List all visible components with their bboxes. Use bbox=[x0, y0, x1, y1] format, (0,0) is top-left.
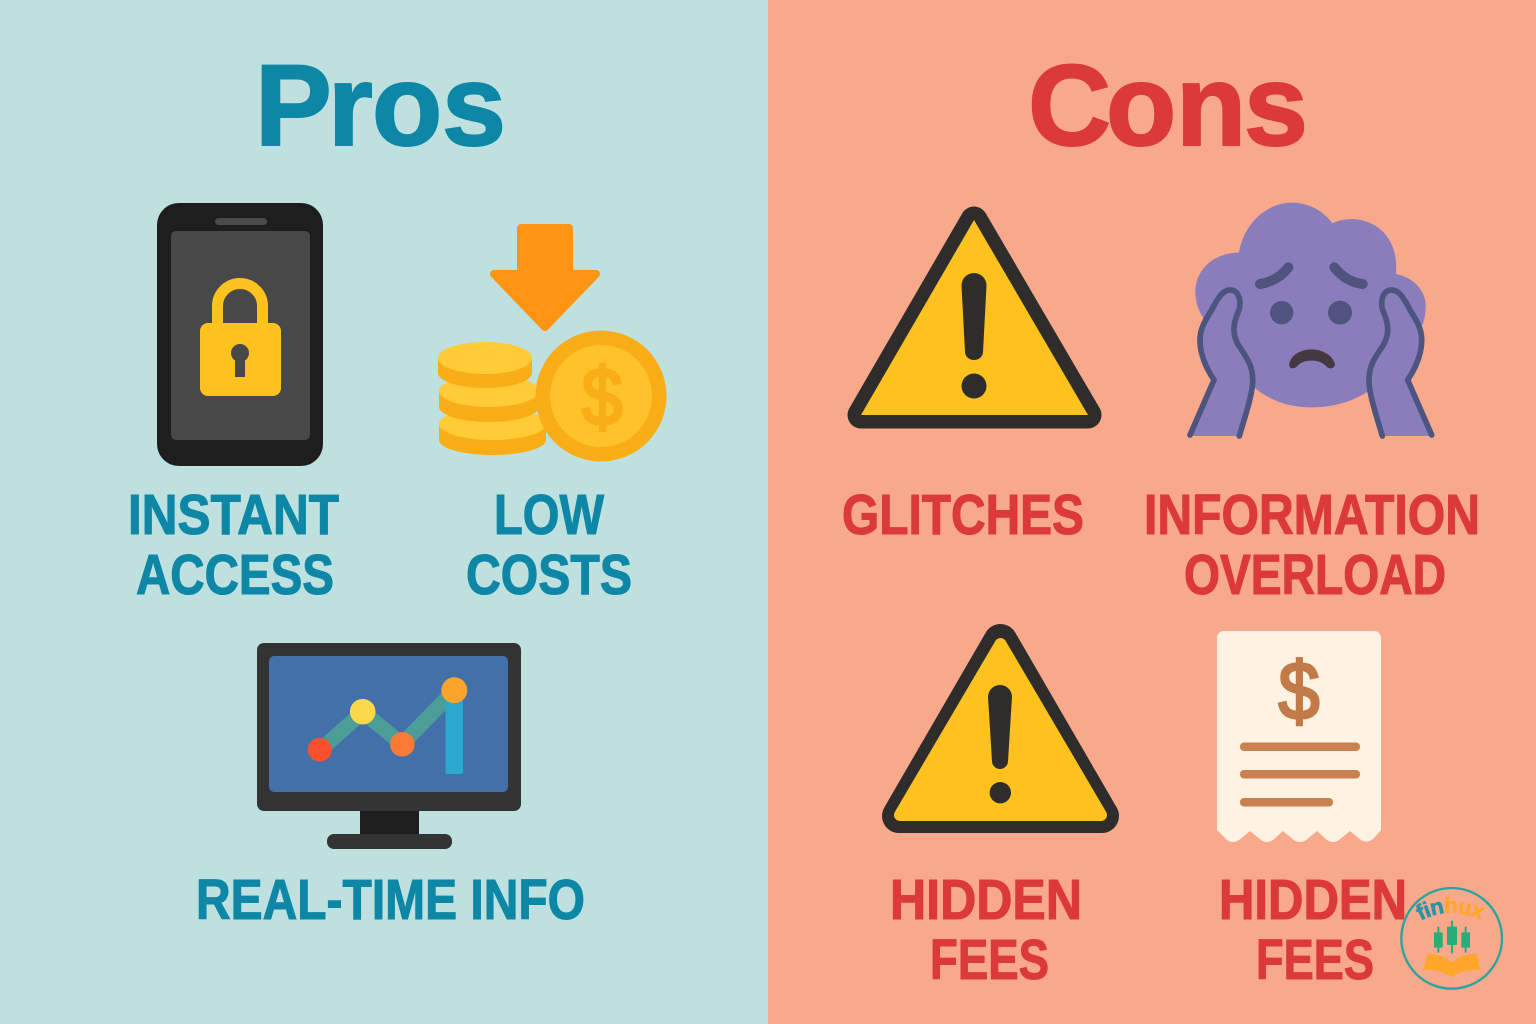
heading: Cons: Cons bbox=[1028, 42, 1308, 170]
icon: receipt with dollar bbox=[1217, 631, 1381, 842]
label: hidden fees right: FEES bbox=[1256, 928, 1374, 992]
icon: warning triangle hidden fees bbox=[899, 641, 1102, 816]
icon: monitor with line chart bbox=[257, 643, 521, 849]
label: low costs: LOW bbox=[494, 483, 604, 547]
label: hidden fees right: HIDDEN bbox=[1219, 868, 1407, 932]
icon: coins with down arrow bbox=[438, 228, 666, 462]
label: glitches: GLITCHES bbox=[842, 483, 1084, 547]
label: low costs bbox=[466, 483, 632, 607]
label: hidden fees left bbox=[890, 868, 1082, 992]
panel: pros background bbox=[0, 0, 768, 1024]
logo: finhux badge bbox=[1400, 886, 1504, 990]
label: hidden fees left: HIDDEN bbox=[890, 868, 1082, 932]
label: hidden fees left: FEES bbox=[930, 928, 1049, 992]
label: information overload: INFORMATION bbox=[1144, 483, 1480, 547]
icon: coins with down arrow: $ bbox=[582, 352, 622, 443]
label: information overload: OVERLOAD bbox=[1184, 543, 1446, 607]
label: instant access bbox=[128, 483, 339, 607]
label: real-time info: REAL-TIME INFO bbox=[196, 868, 585, 932]
label: instant access: ACCESS bbox=[136, 543, 334, 607]
icon: overwhelmed purple face bbox=[1190, 203, 1432, 436]
icon: warning triangle glitches bbox=[861, 220, 1088, 415]
panel: cons background bbox=[768, 0, 1536, 1024]
logo: finhux badge: finhux bbox=[1416, 896, 1486, 920]
label: information overload bbox=[1144, 483, 1480, 607]
heading: Pros: Pros bbox=[255, 42, 506, 170]
label: instant access: INSTANT bbox=[128, 483, 339, 547]
icon: phone with padlock bbox=[157, 203, 323, 466]
icon: receipt with dollar: $ bbox=[1278, 646, 1320, 737]
label: low costs: COSTS bbox=[466, 543, 632, 607]
label: hidden fees right bbox=[1219, 868, 1407, 992]
